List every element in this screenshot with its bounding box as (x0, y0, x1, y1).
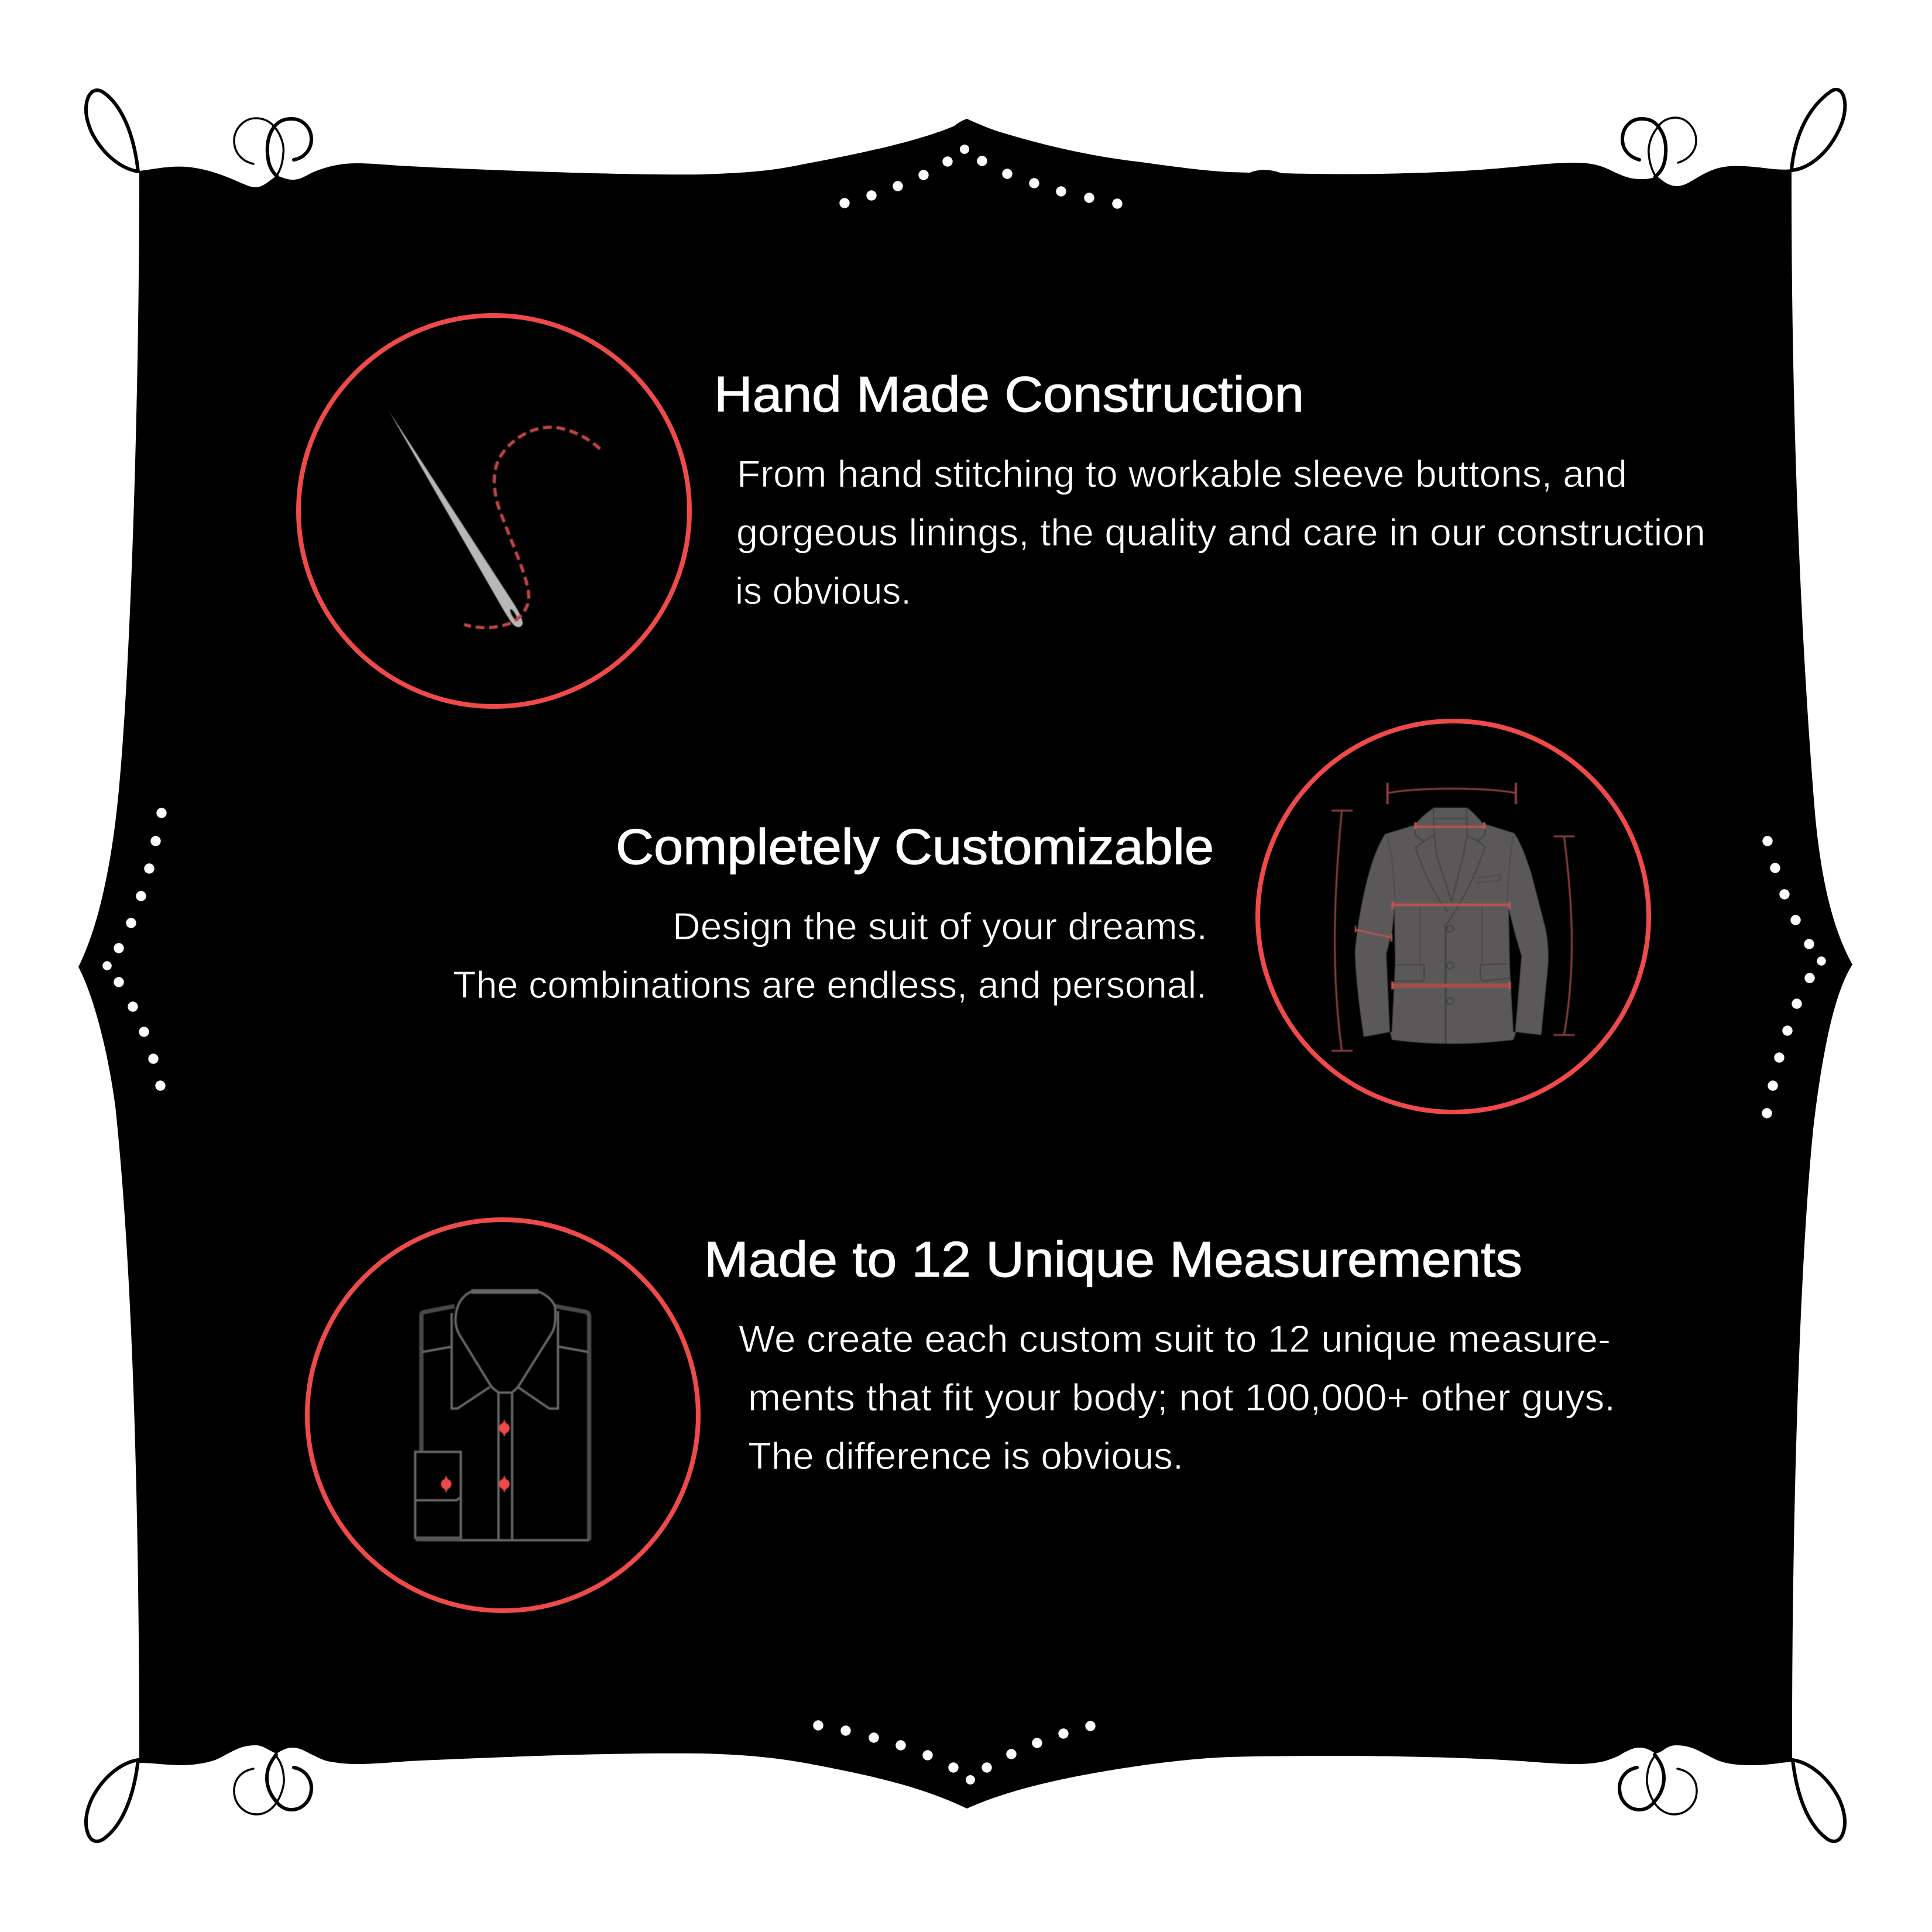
top-right ornament (1622, 90, 1845, 177)
body text: measurements: ments that fit your body; not 100,000+ other guys. (748, 1376, 1615, 1419)
circle: needle badge (298, 315, 689, 706)
heading: made to 12 unique measurements: Made to 12 Unique Measurements (704, 1232, 1522, 1288)
bottom dotted chevron (813, 1720, 1096, 1785)
body text: construction (735, 452, 1705, 612)
body text: measurements (739, 1317, 1615, 1477)
icon: jacket with measurements (1332, 783, 1575, 1051)
body text: customizable (453, 905, 1207, 1006)
body text: measurements: The difference is obvious. (748, 1435, 1183, 1477)
body text: construction: From hand stitching to workable sleeve buttons, and (737, 452, 1627, 495)
top dotted chevron (839, 145, 1123, 209)
bottom-left ornament (86, 1755, 311, 1841)
circle: shirt badge (307, 1220, 698, 1611)
bottom-right ornament (1619, 1755, 1845, 1841)
panel: 12 unique measurements (307, 1220, 1615, 1611)
circle: jacket badge (1258, 721, 1649, 1112)
heading: completely customizable: Completely Customizable (616, 819, 1214, 875)
icon: folded shirt (415, 1292, 589, 1540)
body text: construction: gorgeous linings, the quality and care in our construction (736, 511, 1705, 554)
body text: construction: is obvious. (735, 569, 911, 612)
left dotted chevron (102, 808, 167, 1091)
heading: hand made construction: Hand Made Construction (714, 367, 1304, 423)
top-left ornament (86, 90, 311, 177)
icon: needle and thread (389, 411, 600, 627)
body text: customizable: Design the suit of your dreams. (672, 905, 1207, 948)
panel: hand made construction (298, 315, 1705, 706)
panel: completely customizable (453, 721, 1649, 1112)
body text: customizable: The combinations are endless, and personal. (453, 963, 1207, 1006)
right dotted chevron (1762, 836, 1826, 1118)
body text: measurements: We create each custom suit to 12 unique measure- (739, 1317, 1611, 1360)
